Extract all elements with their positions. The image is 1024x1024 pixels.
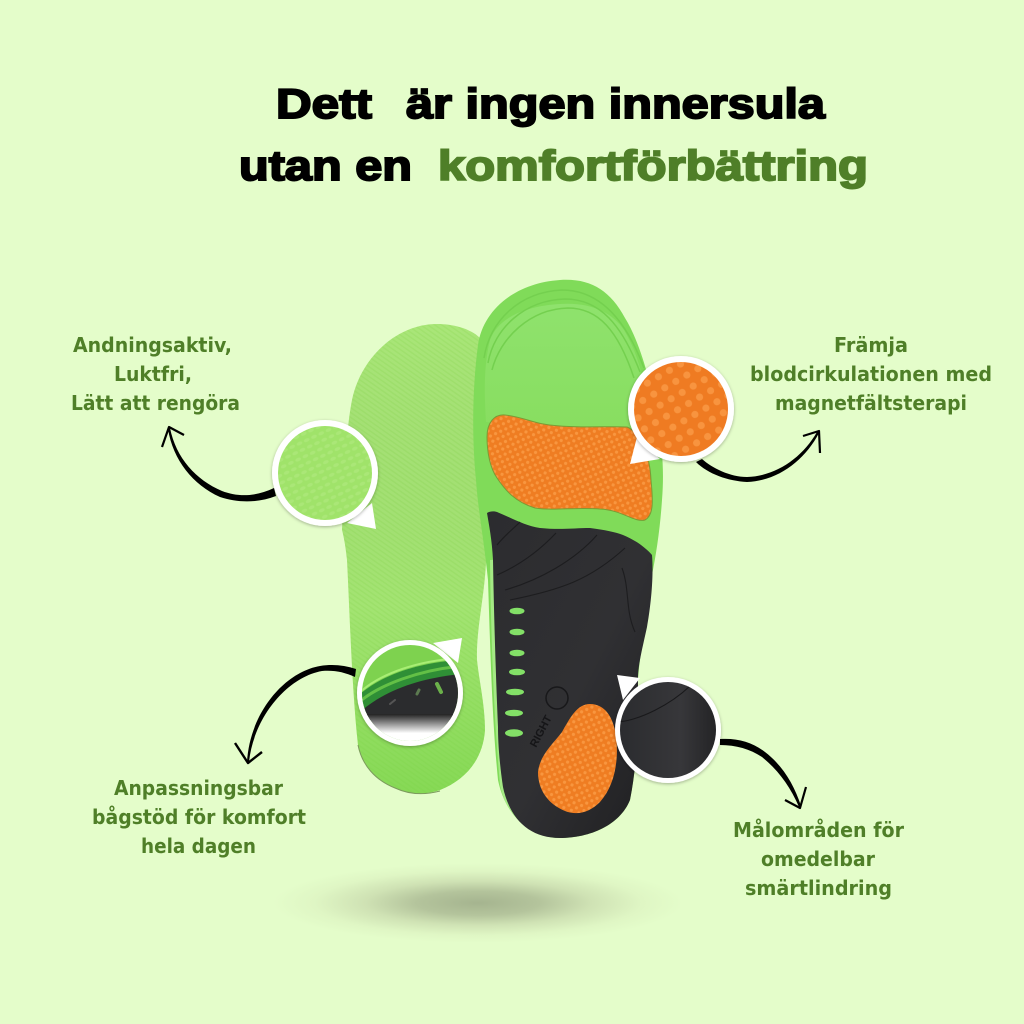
magnifier circle bbox=[272, 420, 378, 526]
pointer bbox=[617, 675, 640, 700]
arrow: arch support bbox=[235, 665, 356, 763]
title: Dett bbox=[276, 80, 372, 127]
label: magnet therapy: magnetfältsterapi bbox=[775, 391, 967, 415]
label: target zones bbox=[733, 818, 904, 900]
label: magnet therapy: Främja bbox=[834, 333, 908, 357]
label: magnet therapy bbox=[750, 333, 992, 415]
brand mark: RIGHT bbox=[528, 713, 555, 749]
light sliver beside the shell bbox=[490, 560, 535, 832]
label: target zones: Målområden för bbox=[733, 818, 904, 842]
brand mark bbox=[528, 687, 568, 749]
callout: magnet therapy bbox=[626, 354, 736, 464]
pointer bbox=[630, 437, 660, 464]
label: arch support: hela dagen bbox=[141, 834, 256, 858]
magnifier circle bbox=[615, 677, 721, 783]
left insole bbox=[342, 324, 486, 794]
label: breathable: Luktfri, bbox=[114, 362, 192, 386]
ground shadow bbox=[273, 863, 683, 943]
label: target zones: omedelbar bbox=[761, 847, 875, 871]
title bbox=[239, 80, 868, 189]
pointer bbox=[347, 503, 376, 529]
callout: breathable fabric bbox=[270, 420, 380, 530]
right insole bbox=[473, 280, 663, 838]
ventilation slots bbox=[505, 608, 525, 737]
forefoot orange pad bbox=[487, 415, 652, 520]
arrow: target zones bbox=[720, 739, 806, 808]
arrow: magnet therapy bbox=[696, 431, 820, 482]
magnifier circle bbox=[357, 640, 463, 746]
label: arch support: Anpassningsbar bbox=[114, 776, 283, 800]
label: breathable bbox=[71, 333, 240, 415]
label: target zones: smärtlindring bbox=[745, 876, 892, 900]
toe ridges bbox=[484, 290, 644, 378]
title: utan en bbox=[239, 142, 412, 189]
title: är ingen innersula bbox=[406, 80, 826, 127]
label: magnet therapy: blodcirkulationen med bbox=[750, 362, 992, 386]
callout: arch support bbox=[357, 638, 463, 746]
black rear shell bbox=[487, 511, 653, 838]
magnifier circle bbox=[628, 356, 734, 462]
label: arch support bbox=[92, 776, 306, 858]
label: breathable: Lätt att rengöra bbox=[71, 391, 240, 415]
heel orange pad bbox=[538, 704, 617, 813]
callout: target zones bbox=[615, 675, 725, 787]
insole body bbox=[473, 280, 663, 838]
title: komfortförbättring bbox=[438, 142, 868, 189]
label: breathable: Andningsaktiv, bbox=[73, 333, 232, 357]
arrow: breathable bbox=[162, 427, 276, 501]
pointer bbox=[433, 638, 462, 663]
label: arch support: bågstöd för komfort bbox=[92, 805, 306, 829]
